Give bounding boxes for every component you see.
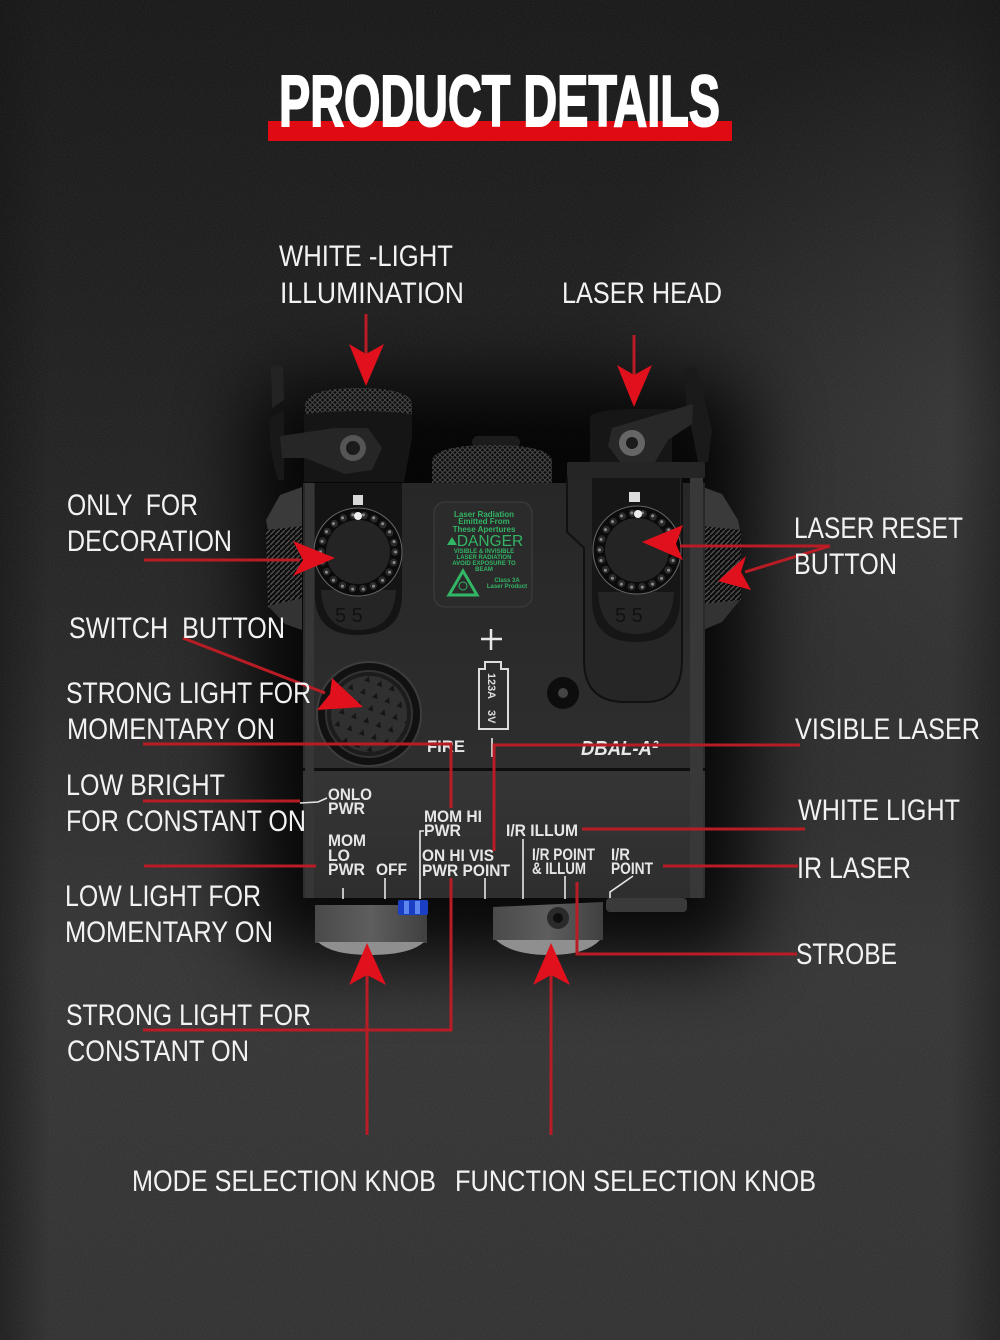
label: laser head: LASER HEAD [562, 277, 722, 310]
danger label: Laser Radiation [454, 510, 514, 519]
white pointer ticks [300, 738, 633, 899]
title: product details: PRODUCT DETAILS [279, 62, 720, 142]
label: strong light momentary [66, 677, 311, 746]
label: strong light constant [66, 999, 311, 1068]
danger label: DANGER [457, 533, 523, 550]
arrow: laser reset side [718, 556, 751, 590]
arrow: decoration [293, 541, 335, 576]
engraved panel labels: ON HI VIS [422, 846, 494, 865]
function selection knob [493, 902, 603, 955]
label: laser reset button [794, 512, 963, 581]
arrow: white-light illumination [349, 344, 384, 386]
battery icon: 123A [485, 673, 497, 699]
arrow: switch button [317, 678, 363, 710]
engraved panel labels: ONLO [328, 785, 372, 804]
left dial recess [315, 483, 402, 635]
label: IR laser: IR LASER [797, 852, 911, 885]
right dial recess [592, 478, 680, 642]
mounting screw [547, 677, 579, 709]
danger label: VISIBLE & INVISIBLE [454, 549, 514, 555]
right dial recess: 5 5 [615, 605, 643, 627]
IR nub [606, 898, 687, 912]
danger label: BEAM [475, 567, 493, 573]
label: laser reset button: LASER RESET [794, 512, 963, 545]
plus mark [481, 629, 502, 650]
danger label [434, 502, 532, 607]
label: white light: WHITE LIGHT [798, 794, 960, 827]
danger label: Laser Product [487, 584, 527, 590]
white-light knurled knob [305, 388, 412, 416]
center knurled knob [432, 436, 552, 486]
left clamp [280, 411, 412, 482]
battery icon: 3V [485, 710, 497, 724]
right rail [690, 478, 703, 898]
left flip lever lower [270, 410, 284, 480]
main body [303, 483, 705, 771]
laser housing [567, 462, 705, 702]
right side knob [703, 487, 741, 630]
danger label: AVOID EXPOSURE TO [452, 561, 516, 567]
engraved panel labels: & ILLUM [532, 859, 586, 878]
engraved panel labels [328, 737, 659, 880]
label: low light momentary [65, 880, 273, 949]
device: DBAL-A2 laser unit [266, 365, 741, 955]
right dial [593, 492, 681, 594]
label: mode selection knob: MODE SELECTION KNOB [132, 1165, 436, 1198]
left flip lever [271, 365, 284, 408]
battery icon [479, 662, 508, 729]
label: strong light constant: STRONG LIGHT FOR [66, 999, 311, 1032]
engraved panel labels: I/R [611, 845, 630, 864]
fire button [317, 662, 421, 766]
label: laser reset button: BUTTON [794, 548, 897, 581]
blue lock tab [398, 900, 428, 915]
left dial [314, 495, 402, 596]
engraved panel labels: I/R POINT [532, 845, 595, 864]
label: low light momentary: MOMENTARY ON [65, 916, 273, 949]
label: switch button: SWITCH BUTTON [69, 612, 285, 645]
leader lines [143, 314, 830, 1135]
right flip lever [684, 367, 712, 462]
danger label: Class 3A [494, 578, 520, 584]
engraved panel labels: PWR [424, 821, 461, 840]
label: strobe: STROBE [796, 938, 897, 971]
label: low bright constant: LOW BRIGHT [66, 769, 225, 802]
label: strong light constant: CONSTANT ON [67, 1035, 249, 1068]
label: white-light illumination: WHITE -LIGHT [279, 240, 453, 273]
arrow: mode selection knob [349, 943, 386, 985]
danger label: LASER RADIATION [457, 555, 511, 561]
label: low bright constant [66, 769, 306, 838]
engraved panel labels: FIRE [427, 737, 465, 756]
label: only for decoration: ONLY FOR [67, 489, 198, 522]
arrow: function selection knob [533, 943, 570, 985]
danger label: These Apertures [453, 525, 516, 534]
label: low light momentary: LOW LIGHT FOR [65, 880, 261, 913]
label: only for decoration [67, 489, 232, 558]
label: strong light momentary: STRONG LIGHT FOR [66, 677, 311, 710]
mode selection knob [315, 905, 427, 955]
laser-head clamp [590, 404, 693, 464]
label: low bright constant: FOR CONSTANT ON [66, 805, 306, 838]
left side knob [266, 487, 302, 630]
engraved panel labels: POINT [611, 859, 653, 878]
engraved panel labels: PWR POINT [422, 861, 511, 880]
left dial recess: 5 5 [335, 605, 363, 627]
engraved panel labels: PWR [328, 860, 365, 879]
arrow: laser head [617, 365, 652, 407]
lower control panel [303, 768, 705, 898]
engraved panel labels: DBAL-A² [581, 738, 659, 760]
danger label: Emitted From [458, 517, 510, 526]
label: function selection knob: FUNCTION SELECTION KNOB [455, 1165, 816, 1198]
label: strong light momentary: MOMENTARY ON [67, 713, 275, 746]
engraved panel labels: OFF [376, 860, 407, 879]
label: only for decoration: DECORATION [67, 525, 232, 558]
arrow: laser reset center [642, 525, 683, 560]
engraved panel labels: I/R ILLUM [506, 821, 578, 840]
engraved panel labels: PWR [328, 799, 365, 818]
left rail [305, 483, 314, 898]
engraved panel labels: MOM [328, 831, 366, 850]
engraved panel labels: LO [328, 846, 350, 865]
engraved panel labels: MOM HI [424, 807, 482, 826]
label: white-light illumination: ILLUMINATION [280, 277, 464, 310]
title: product details [268, 62, 732, 142]
label: white-light illumination [279, 240, 464, 310]
